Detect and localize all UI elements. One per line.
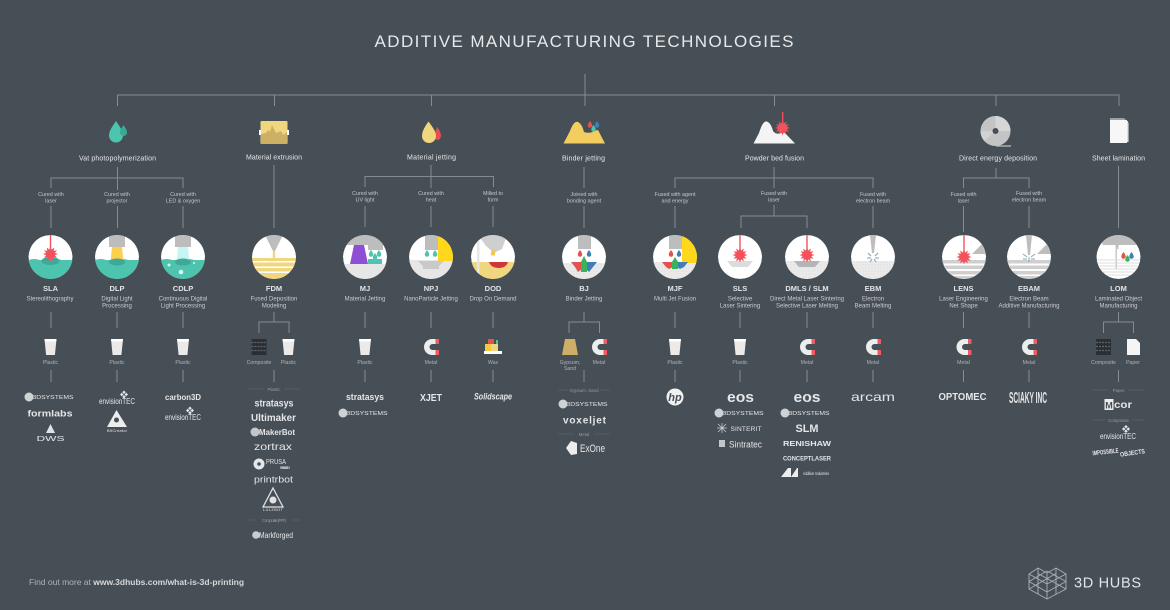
panel: direct energy deposition xyxy=(938,116,1060,407)
process: DLP: Digital Light xyxy=(101,296,133,302)
process: CDLP: Continuous Digital xyxy=(159,296,207,302)
process: EBAM xyxy=(998,235,1060,310)
logos: binder manufacturers xyxy=(558,388,610,455)
logos: CDLP manufacturers: envisionTEC xyxy=(165,413,201,422)
process: SLS: Selective xyxy=(728,296,753,302)
logos: FDM manufacturers: Ultimaker xyxy=(251,413,296,424)
logos: FDM manufacturers: RESEARCH xyxy=(280,466,290,470)
process: LENS: LENS xyxy=(953,284,974,293)
logos: lamination manufacturers: IMPOSSIBLE xyxy=(1092,448,1119,457)
logos: lamination manufacturers: envisionTEC xyxy=(1100,432,1136,441)
process: DMLS / SLM: Direct Metal Laser Sintering xyxy=(770,296,844,302)
logos: DLP manufacturers: envisionTEC xyxy=(99,397,135,406)
heading: binder jetting: Binder jetting xyxy=(562,156,605,162)
logos: jetting manufacturers: stratasys xyxy=(346,392,384,403)
process labels: fusing: Fused with xyxy=(860,192,886,198)
logos: CDLP manufacturers: carbon3D xyxy=(165,392,201,402)
materials: plastic and metal: Metal xyxy=(867,360,879,366)
process labels: jetting: Cured with xyxy=(418,191,444,197)
panel: material extrusion xyxy=(246,121,302,540)
logos: lamination manufacturers: Paper xyxy=(1113,388,1125,393)
process: LENS xyxy=(939,235,988,310)
process: DOD xyxy=(469,235,517,302)
process: MJ: Material Jetting xyxy=(345,296,385,302)
materials: gypsum sand and metal: Metal xyxy=(593,360,605,366)
process: CDLP: Light Processing xyxy=(161,304,205,310)
panel: sheet lamination xyxy=(1091,118,1146,459)
logos: powder bed manufacturers: Additive Industries xyxy=(803,471,830,476)
connector: lamination branch xyxy=(1104,166,1134,382)
logos: lamination manufacturers: Composite xyxy=(1108,418,1130,423)
materials: metal xyxy=(956,339,1037,366)
logos: DLP manufacturers xyxy=(99,390,135,433)
materials: gypsum sand and metal: Gypsum, xyxy=(560,360,580,366)
process: LOM xyxy=(1095,235,1142,310)
process: MJ xyxy=(343,235,387,302)
materials: composite and plastic: Composite xyxy=(247,360,272,366)
icon: resin drops xyxy=(109,121,127,142)
footer link: Find out more at www.3dhubs.com/what-is-3d-printing xyxy=(29,577,244,587)
process: EBAM: EBAM xyxy=(1018,284,1040,293)
materials: plastic: Plastic xyxy=(175,360,191,366)
process labels: curing: Cured with xyxy=(104,192,130,198)
main connector tree xyxy=(118,74,1119,106)
process: MJ: MJ xyxy=(360,284,370,293)
process labels: jetting: form xyxy=(488,198,499,204)
title: ADDITIVE MANUFACTURING TECHNOLOGIES xyxy=(374,32,794,51)
logos: powder bed manufacturers: arcam xyxy=(851,390,895,404)
process labels: curing: LED & oxygen xyxy=(166,198,200,204)
process labels: binder: Joined with xyxy=(571,192,597,198)
logos: FDM manufacturers xyxy=(248,387,300,540)
materials: plastic: Plastic xyxy=(109,360,125,366)
logos: binder manufacturers: ExOne xyxy=(580,443,605,455)
heading: powder bed fusion: Powder bed fusion xyxy=(745,156,804,162)
logos: FDM manufacturers: MakerBot xyxy=(259,427,295,437)
process: DLP: Processing xyxy=(102,304,132,310)
connector: powder branches xyxy=(675,167,873,382)
process: LENS: Laser Engineering xyxy=(939,296,988,302)
materials: plastic, metal, wax xyxy=(357,339,502,366)
process: EBAM: Additive Manufacturing xyxy=(998,304,1060,310)
connector: extrusion branch xyxy=(259,165,289,382)
process: EBM xyxy=(851,235,895,310)
process: BJ: Binder Jetting xyxy=(566,296,602,302)
icon: powder with coloured drops xyxy=(564,121,605,144)
materials: plastic, metal, wax: Plastic xyxy=(357,360,373,366)
logos: powder bed manufacturers: SLM xyxy=(796,423,818,435)
materials: plastic and metal: Plastic xyxy=(732,360,748,366)
connector: vat branches xyxy=(51,167,183,382)
logos: powder bed manufacturers xyxy=(666,388,895,477)
icon: paper sheets xyxy=(1110,118,1129,143)
logos: jetting manufacturers: XJET xyxy=(420,392,442,404)
materials: plastic, metal, wax: Wax xyxy=(488,360,498,366)
icon: jetting drops xyxy=(422,122,441,143)
process labels: binder xyxy=(567,192,602,204)
logos: lamination manufacturers: cor xyxy=(1114,400,1132,411)
logos: SLA manufacturers: DWS xyxy=(36,436,65,443)
process labels: deposition xyxy=(950,191,1047,204)
heading: material jetting: Material jetting xyxy=(407,154,456,162)
logos: lamination manufacturers: OBJECTS xyxy=(1120,448,1146,459)
materials: gypsum sand and metal xyxy=(560,339,607,372)
materials: composite and plastic: Plastic xyxy=(281,360,297,366)
process: DMLS / SLM: DMLS / SLM xyxy=(785,284,829,293)
process: NPJ: NanoParticle Jetting xyxy=(404,296,458,302)
heading: material extrusion: Material extrusion xyxy=(246,154,302,162)
process: SLS: Laser Sintering xyxy=(720,304,760,310)
logos: FDM manufacturers: PRUSA xyxy=(266,457,286,466)
heading: vat photopolymerization: Vat photopolymerization xyxy=(79,156,156,162)
materials: plastic and metal xyxy=(667,339,881,366)
process: MJF: MJF xyxy=(668,284,683,293)
3D Hubs logo xyxy=(1029,568,1141,599)
logos: jetting manufacturers: 3DSYSTEMS xyxy=(346,411,388,417)
logos: deposition manufacturers: OPTOMEC xyxy=(938,392,986,403)
process labels: fusing xyxy=(654,191,891,204)
materials: composite and paper: Composite xyxy=(1091,360,1116,366)
process: MJF: Multi Jet Fusion xyxy=(654,296,696,302)
icon: wire spool xyxy=(980,116,1011,146)
materials: plastic: Plastic xyxy=(43,360,59,366)
logos: powder bed manufacturers: 3DSYSTEMS xyxy=(788,411,830,417)
logos: binder manufacturers: Metal xyxy=(579,432,589,437)
process: SLA xyxy=(26,235,74,302)
panel: vat photopolymerization xyxy=(24,121,207,443)
logos: FDM manufacturers: LULZBOT xyxy=(263,508,284,512)
process labels: fusing: and energy xyxy=(662,198,689,204)
process: CDLP xyxy=(159,235,207,310)
icon: powder mound with laser xyxy=(754,112,795,144)
materials: plastic and metal: Plastic xyxy=(667,360,683,366)
logos: deposition manufacturers xyxy=(938,390,1047,407)
process labels: curing xyxy=(38,192,200,204)
materials: plastic xyxy=(43,339,191,366)
process labels: curing: projector xyxy=(107,198,128,204)
panel: material jetting xyxy=(338,122,517,418)
logos: SLA manufacturers: 3DSYSTEMS xyxy=(32,395,74,401)
process: SLA: SLA xyxy=(43,284,59,293)
process: SLS: SLS xyxy=(733,284,747,293)
process: EBAM: Electron Beam xyxy=(1009,296,1049,302)
logos: powder bed manufacturers: hp xyxy=(668,392,682,404)
process labels: jetting: UV light xyxy=(356,198,375,204)
logos: DLP manufacturers: B9Creator xyxy=(107,428,128,433)
process: NPJ: NPJ xyxy=(424,284,438,293)
process labels: deposition: electron beam xyxy=(1012,198,1047,204)
process labels: fusing: laser xyxy=(768,198,780,204)
logos: powder bed manufacturers: 3DSYSTEMS xyxy=(722,411,764,417)
materials: plastic and metal: Metal xyxy=(801,360,813,366)
process: SLS xyxy=(718,235,762,310)
logos: powder bed manufacturers: eos xyxy=(727,389,754,406)
process labels: curing: laser xyxy=(45,198,57,204)
process: LOM: LOM xyxy=(1110,284,1127,293)
logos: FDM manufacturers: Composite (FFF) xyxy=(262,518,287,523)
process labels: deposition: Fused with xyxy=(1016,191,1042,197)
logos: FDM manufacturers: stratasys xyxy=(254,398,294,410)
3D Hubs logo: 3D HUBS xyxy=(1074,576,1141,592)
logos: jetting manufacturers xyxy=(338,392,512,418)
heading: direct energy deposition: Direct energy deposition xyxy=(959,156,1037,162)
materials: metal: Metal xyxy=(1023,360,1035,366)
logos: FDM manufacturers: Markforged xyxy=(259,531,293,540)
process: LENS: Net Shape xyxy=(949,304,978,310)
process: LOM: Manufacturing xyxy=(1099,304,1138,310)
logos: FDM manufacturers: printrbot xyxy=(254,474,293,486)
logos: binder manufacturers: Gypsum, Sand xyxy=(569,388,599,393)
logos: FDM manufacturers: Plastic xyxy=(268,387,281,392)
logos: powder bed manufacturers: RENISHAW xyxy=(783,439,832,448)
process labels: jetting: Cured with xyxy=(352,191,378,197)
logos: binder manufacturers: 3DSYSTEMS xyxy=(566,402,608,408)
process: DOD: Drop On Demand xyxy=(469,296,517,302)
process: FDM: FDM xyxy=(266,284,282,293)
process labels: fusing: electron beam xyxy=(856,198,891,204)
process: LOM: Laminated Object xyxy=(1095,296,1142,302)
logos: jetting manufacturers: Solidscape xyxy=(474,392,512,402)
process: BJ: BJ xyxy=(579,284,589,293)
process: EBM: EBM xyxy=(865,284,881,293)
process labels: curing: Cured with xyxy=(38,192,64,198)
process labels: jetting xyxy=(352,191,503,204)
process labels: curing: Cured with xyxy=(170,192,196,198)
logos: lamination manufacturers xyxy=(1092,388,1146,459)
materials: metal: Metal xyxy=(957,360,970,366)
process: DOD: DOD xyxy=(485,284,502,293)
process labels: fusing: Fused with xyxy=(761,191,787,197)
process: BJ xyxy=(562,235,606,302)
process: MJF xyxy=(653,235,697,302)
process: CDLP: CDLP xyxy=(173,284,193,293)
logos: FDM manufacturers: zortrax xyxy=(254,441,293,453)
process: DMLS / SLM xyxy=(770,235,844,310)
materials: composite and paper: Paper xyxy=(1126,360,1140,366)
panel: direct energy deposition: SCIAKY INC xyxy=(1009,390,1047,407)
process labels: jetting: heat xyxy=(426,198,437,204)
process: DLP xyxy=(95,235,139,310)
logos: powder bed manufacturers: Sintratec xyxy=(729,440,762,450)
process: DLP: DLP xyxy=(110,284,124,293)
connector: jetting branches xyxy=(365,165,494,382)
logos: powder bed manufacturers: CONCEPTLASER xyxy=(783,456,831,462)
logos: powder bed manufacturers: SINTERIT xyxy=(730,426,762,433)
logos: CDLP manufacturers xyxy=(165,392,201,422)
heading: sheet lamination: Sheet lamination xyxy=(1092,156,1145,162)
process: DMLS / SLM: Selective Laser Melting xyxy=(776,304,838,310)
process labels: jetting: Milled to xyxy=(483,191,503,197)
process labels: binder: bonding agent xyxy=(567,198,602,204)
logos: SLA manufacturers: formlabs xyxy=(28,408,72,420)
materials: plastic, metal, wax: Metal xyxy=(425,360,437,366)
panel: powder bed fusion xyxy=(653,112,895,477)
connector: deposition branches xyxy=(964,168,1029,382)
process labels: fusing: Fused with agent xyxy=(654,192,696,198)
process: EBM: Beam Melting xyxy=(855,304,891,310)
process: FDM: Modeling xyxy=(262,304,286,310)
process: SLA: Stereolithography xyxy=(26,296,74,302)
logos: powder bed manufacturers: eos xyxy=(794,389,820,406)
process: FDM: Fused Deposition xyxy=(251,296,297,302)
connector: binder branch xyxy=(569,167,600,382)
materials: composite and paper xyxy=(1091,339,1140,366)
process labels: deposition: Fused with xyxy=(950,192,977,198)
icon: filament box xyxy=(259,121,289,144)
process: NPJ xyxy=(404,235,458,302)
logos: SLA manufacturers xyxy=(24,392,74,443)
process: EBM: Electron xyxy=(862,296,884,302)
materials: gypsum sand and metal: Sand xyxy=(564,366,576,372)
process: FDM xyxy=(251,235,297,310)
logos: lamination manufacturers: M xyxy=(1105,400,1113,410)
process labels: deposition: laser xyxy=(958,198,970,204)
logos: binder manufacturers: voxeljet xyxy=(563,416,607,426)
panel: binder jetting xyxy=(558,121,610,455)
materials: composite and plastic xyxy=(247,339,297,366)
